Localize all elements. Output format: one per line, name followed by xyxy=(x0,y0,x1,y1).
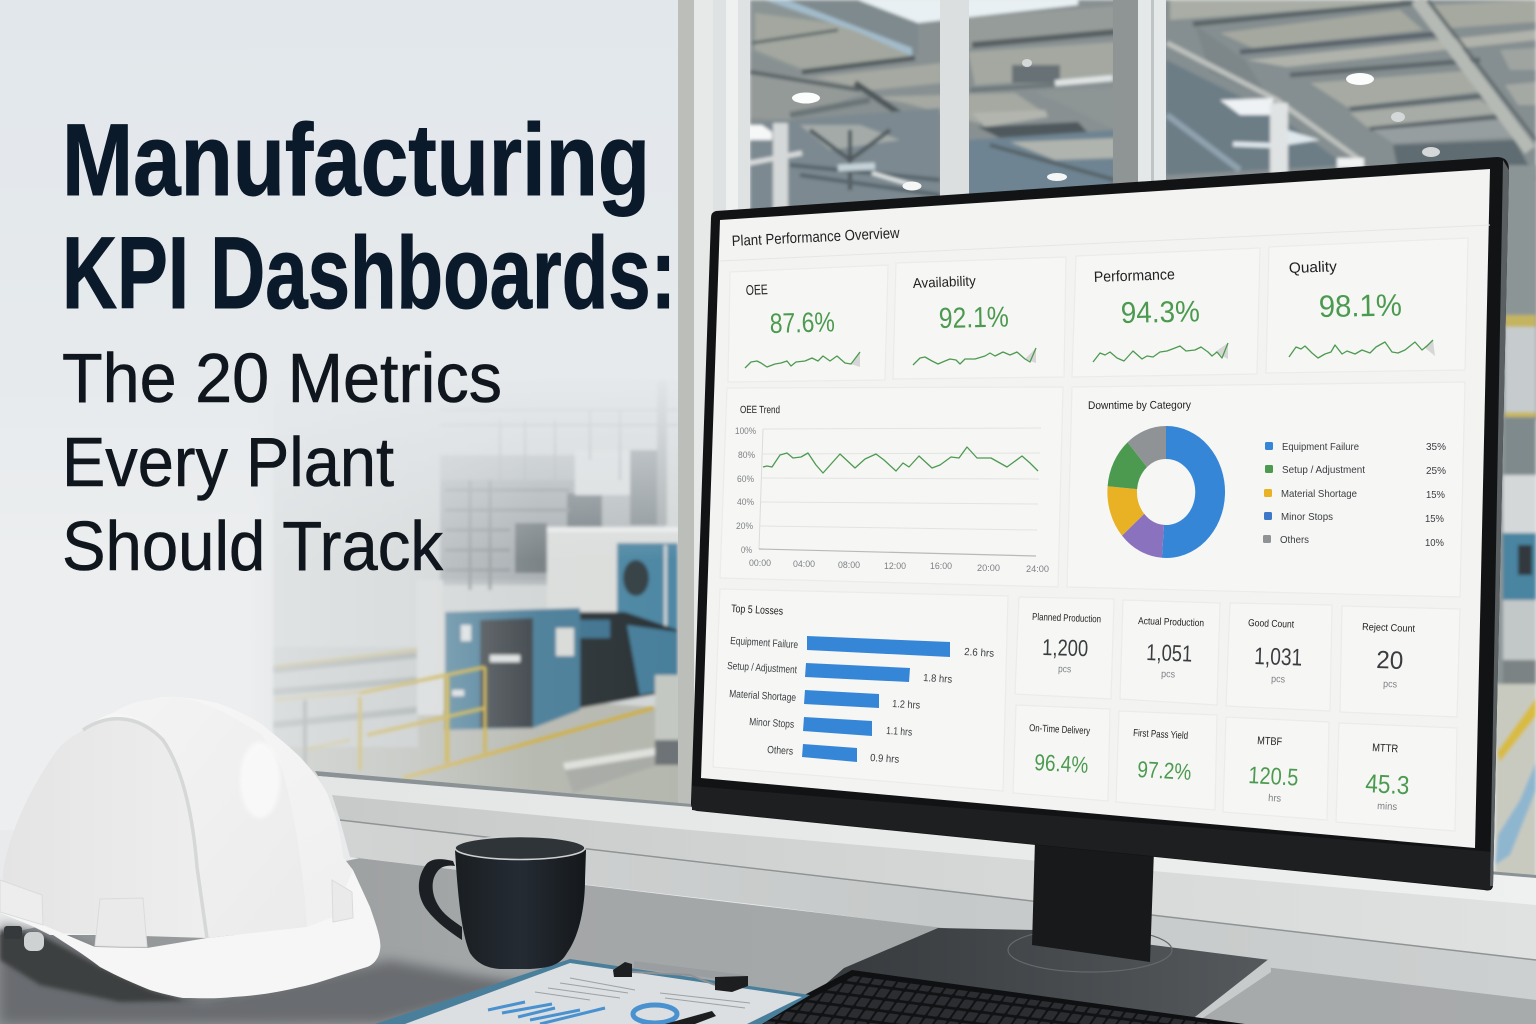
legend: 15% xyxy=(1426,489,1445,501)
hat center band xyxy=(113,697,307,938)
value: 1,031 xyxy=(1254,643,1303,672)
Quality value: 98.1% xyxy=(1319,288,1402,324)
panel: OEE Trend xyxy=(720,387,1063,587)
subtitle line 1: The 20 Metrics xyxy=(62,339,502,417)
background: factory floor on the right xyxy=(1495,165,1536,885)
header divider xyxy=(720,225,1490,261)
chart: horizontal bars xyxy=(802,636,950,762)
monitor bezel xyxy=(691,157,1509,890)
legend: 25% xyxy=(1426,465,1446,477)
Quality label: Quality xyxy=(1289,258,1338,277)
title line 2: KPI Dashboards: xyxy=(62,216,676,330)
bar values: 1.1 hrs xyxy=(886,725,913,739)
Availability value: 92.1% xyxy=(938,302,1009,335)
x axis labels: 12:00 xyxy=(884,561,906,572)
icon: clipboard with printed charts xyxy=(375,959,810,1024)
right pane ceiling xyxy=(1166,0,1536,175)
panel: Availability xyxy=(893,257,1066,379)
label: Actual Production xyxy=(1138,616,1204,629)
OEE value: 87.6% xyxy=(769,306,835,339)
left pane ceiling xyxy=(750,0,912,72)
legend: Others xyxy=(1280,534,1309,546)
title xyxy=(62,103,676,330)
legend: Minor Stops xyxy=(1281,511,1333,523)
background: left fog gradient xyxy=(0,0,690,830)
unit: hrs xyxy=(1268,793,1281,805)
subtitle line 2: Every Plant xyxy=(62,423,394,501)
unit: pcs xyxy=(1383,679,1397,690)
desk surface xyxy=(0,857,1536,1024)
keyboard xyxy=(749,970,1245,1024)
OEE Trend heading: OEE Trend xyxy=(740,404,780,416)
x axis labels xyxy=(749,558,1049,575)
panel: MTBF xyxy=(1223,717,1329,820)
subtitle xyxy=(62,339,502,585)
unit: pcs xyxy=(1271,674,1285,685)
bar values xyxy=(870,646,994,766)
y axis labels: 80% xyxy=(738,450,755,460)
panel: Quality xyxy=(1266,238,1468,373)
hat brim xyxy=(0,870,380,998)
legend: Equipment Failure xyxy=(1282,441,1359,453)
Availability label: Availability xyxy=(912,272,976,291)
pen xyxy=(665,1011,716,1024)
bar labels xyxy=(727,635,799,758)
clip xyxy=(613,961,748,992)
panel: Performance xyxy=(1072,248,1260,377)
y axis labels: 20% xyxy=(736,521,753,531)
value: 97.2% xyxy=(1137,756,1192,785)
label: Planned Production xyxy=(1032,612,1101,625)
Quality sparkline xyxy=(1289,340,1435,358)
hat dome xyxy=(0,697,353,935)
hat side clips xyxy=(0,880,353,947)
x axis labels: 08:00 xyxy=(838,560,860,571)
background: racks xyxy=(440,380,680,590)
background: ceiling lights xyxy=(792,59,1440,190)
value: 120.5 xyxy=(1248,762,1299,792)
dashboard title: Plant Performance Overview xyxy=(731,225,900,250)
background: top fog gradient xyxy=(0,0,690,560)
printed donut xyxy=(633,1005,677,1023)
value: 96.4% xyxy=(1034,749,1089,778)
panel: Top 5 Losses xyxy=(713,589,1008,791)
bar values: 2.6 hrs xyxy=(964,646,994,660)
hat dome highlight xyxy=(240,742,280,818)
unit: pcs xyxy=(1161,669,1175,680)
title line 1: Manufacturing xyxy=(62,103,650,217)
legend: Material Shortage xyxy=(1281,488,1357,500)
label: MTTR xyxy=(1372,742,1398,755)
background: white cabinet and blue machines xyxy=(445,527,680,730)
bar labels: Minor Stops xyxy=(749,716,794,731)
subtitle line 3: Should Track xyxy=(62,507,444,585)
panel: Good Count xyxy=(1226,603,1332,711)
y axis labels: 0% xyxy=(741,545,752,555)
panel: OEE xyxy=(728,265,888,382)
panel: First Pass Yield xyxy=(1116,711,1217,810)
monitor stand neck xyxy=(1032,840,1154,962)
legend: 10% xyxy=(1425,537,1444,549)
value: 1,051 xyxy=(1146,639,1193,667)
panel: MTTR xyxy=(1336,723,1457,831)
Performance sparkline xyxy=(1093,343,1228,362)
OEE label: OEE xyxy=(745,281,768,298)
bar labels: Equipment Failure xyxy=(730,635,799,651)
panel: Downtime by Category xyxy=(1067,382,1465,597)
value: 45.3 xyxy=(1365,768,1410,800)
label: MTBF xyxy=(1257,735,1283,748)
hat left shell xyxy=(0,717,207,938)
label: Good Count xyxy=(1248,618,1294,631)
OEE sparkline xyxy=(745,352,860,368)
panel: Reject Count xyxy=(1340,606,1460,717)
label: Reject Count xyxy=(1362,622,1415,635)
y axis labels: 100% xyxy=(735,426,756,436)
background: left rail zone xyxy=(273,580,443,747)
bar values: 1.2 hrs xyxy=(892,698,920,712)
value: 1,200 xyxy=(1042,634,1089,661)
legend: 35% xyxy=(1426,441,1446,453)
Performance label: Performance xyxy=(1094,266,1175,286)
x axis labels: 00:00 xyxy=(749,558,771,569)
legend: Setup / Adjustment xyxy=(1282,464,1365,476)
label: On-Time Delivery xyxy=(1029,723,1090,737)
printed bar chart xyxy=(488,1002,605,1024)
Top 5 Losses heading: Top 5 Losses xyxy=(731,603,784,618)
bar labels: Setup / Adjustment xyxy=(727,660,797,676)
bar labels: Material Shortage xyxy=(729,688,797,704)
y axis labels: 60% xyxy=(737,474,754,484)
Performance value: 94.3% xyxy=(1120,295,1200,330)
label: First Pass Yield xyxy=(1133,728,1188,742)
chart: donut xyxy=(1107,426,1225,558)
x axis labels: 16:00 xyxy=(930,561,952,572)
background: crate xyxy=(563,675,680,793)
desk dark shade xyxy=(0,925,540,1024)
unit: pcs xyxy=(1058,664,1071,675)
value: 20 xyxy=(1376,646,1404,675)
hat shadow xyxy=(0,930,240,1002)
window sill xyxy=(315,771,1536,1004)
unit: mins xyxy=(1377,801,1397,813)
monitor stand base xyxy=(780,928,1271,1024)
Downtime heading: Downtime by Category xyxy=(1088,399,1191,412)
x axis labels: 04:00 xyxy=(793,559,815,570)
y axis labels: 40% xyxy=(737,497,754,507)
panel: On-Time Delivery xyxy=(1013,705,1110,801)
bar values: 0.9 hrs xyxy=(870,752,899,766)
legend: 15% xyxy=(1425,513,1444,525)
hat ridge line xyxy=(83,719,207,938)
background: yellow safety railings and floor line xyxy=(275,650,653,778)
legend xyxy=(1263,441,1446,549)
y axis labels xyxy=(735,426,756,555)
chart: line xyxy=(735,426,1049,575)
background: blurred factory machines on the left xyxy=(273,380,690,810)
bar values: 1.8 hrs xyxy=(923,672,952,686)
hat straps below brim xyxy=(4,926,22,939)
icon: white hard hat xyxy=(0,697,380,1002)
Availability sparkline xyxy=(913,348,1036,365)
x axis labels: 24:00 xyxy=(1026,564,1049,575)
background: factory ceiling through window xyxy=(748,0,1536,420)
bar labels: Others xyxy=(767,744,794,758)
panel: Actual Production xyxy=(1120,600,1220,705)
trend line xyxy=(763,447,1038,473)
monitor screen xyxy=(701,169,1490,848)
panel: Planned Production xyxy=(1015,597,1114,699)
icon: coffee mug xyxy=(419,836,586,969)
window frame: verticals xyxy=(678,0,1166,825)
x axis labels: 20:00 xyxy=(977,563,1000,574)
middle pane ceiling xyxy=(968,6,1115,48)
